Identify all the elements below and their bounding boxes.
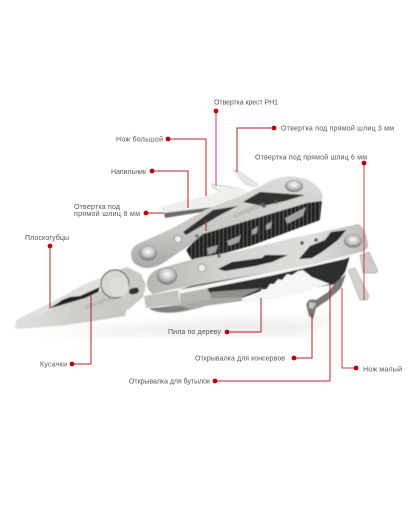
- callout: can opener: [195, 313, 312, 362]
- callout: 8 mm screwdriver: прямой шлиц 8 мм: [74, 210, 140, 218]
- dark interior: [172, 256, 350, 300]
- callout: large knife: Нож большой: [116, 136, 163, 144]
- callout: wood saw: [168, 298, 261, 336]
- saw: [241, 270, 330, 304]
- callout: large knife: [116, 136, 206, 231]
- callout: 8 mm screwdriver: [74, 204, 164, 218]
- jaw serration: [48, 287, 100, 309]
- callout: 6 mm screwdriver: [255, 154, 367, 300]
- can opener: [307, 274, 346, 319]
- tool: 3 mm screwdriver: [233, 170, 258, 187]
- tool: file and 8 mm blade: [160, 187, 250, 214]
- ribbed handle interior: [186, 198, 322, 262]
- upper jaw: [15, 277, 105, 325]
- callout: bottle opener: [129, 283, 330, 386]
- callout: Phillips screwdriver: Отвертка крест PH1: [214, 100, 278, 106]
- lower bolts: [157, 268, 177, 284]
- pliers: [15, 267, 190, 329]
- lower plate holes: [198, 264, 206, 272]
- upper plate cut-outs: [183, 206, 238, 235]
- callout: 3 mm screwdriver: Отвертка под прямой шлиц 3 мм: [281, 124, 394, 132]
- callout: small knife: Нож малый: [363, 366, 402, 374]
- brand mark: CONTERTOOL: [233, 201, 267, 220]
- callout: pliers: Плоскогубцы: [25, 234, 69, 242]
- rib cut-outs: [207, 207, 306, 255]
- lower jaw: [15, 290, 128, 329]
- hub ring: [101, 270, 129, 298]
- lower tools: saw, blades and openers: [150, 252, 378, 319]
- callout: pliers: [25, 234, 69, 308]
- tool: Phillips screwdriver: [212, 184, 238, 192]
- callout: Phillips screwdriver: [214, 100, 278, 186]
- callout: 3 mm screwdriver: [237, 124, 394, 172]
- lower plate cut-outs: [218, 255, 288, 271]
- side tool: [360, 252, 378, 273]
- callout: wire cutters: [40, 295, 91, 368]
- callout: 8 mm screwdriver: Отвертка под: [74, 204, 120, 211]
- callout: wood saw: Пила по дереву: [168, 329, 222, 336]
- hub slot: [128, 287, 140, 295]
- plate holes: [174, 235, 182, 243]
- hub: [102, 267, 146, 310]
- highlight edge: [178, 251, 364, 294]
- upper bolts: [139, 246, 157, 260]
- lower left box: [144, 290, 180, 308]
- upper handle plate: [131, 176, 323, 268]
- small knife: [348, 268, 369, 300]
- metal detail: [180, 287, 212, 305]
- callout: file: Напильник: [111, 169, 147, 176]
- callout: can opener: Открывалка для консервов: [195, 356, 285, 362]
- soft shadow: [30, 312, 340, 336]
- lower handle plate: [147, 224, 368, 294]
- lower arm: [150, 297, 242, 313]
- brand mark on jaw: CONTERTOOL: [85, 294, 116, 310]
- callout: small knife: [342, 288, 402, 374]
- callout: 6 mm screwdriver: Отвертка под прямой шлиц 6 мм: [255, 154, 367, 162]
- callout: bottle opener: Открывалка для бутылок: [129, 378, 211, 386]
- callout: wire cutters: Кусачки: [40, 362, 67, 368]
- callout: file: [111, 169, 188, 208]
- multitool: [15, 170, 378, 329]
